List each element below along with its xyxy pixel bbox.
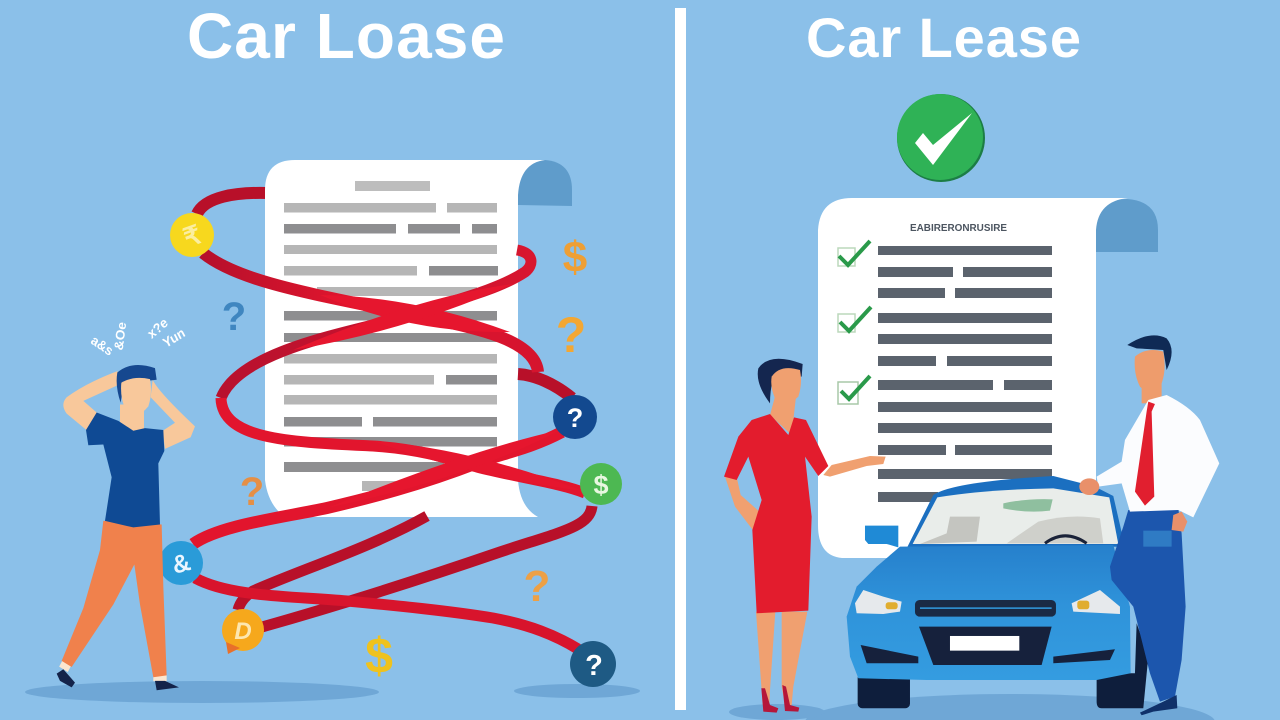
floating symbols: ? — [524, 562, 550, 611]
coin: teal question — [570, 641, 616, 687]
ground shadows — [25, 681, 640, 703]
shoes — [57, 669, 179, 690]
roof and pillars — [907, 476, 1125, 548]
person: woman in red dress — [724, 359, 886, 713]
body — [847, 545, 1131, 680]
coin: light blue ampersand — [159, 541, 203, 585]
icon: green check badge — [897, 94, 985, 182]
face — [771, 368, 801, 403]
confused scribbles: &Oe — [111, 321, 129, 351]
person: confused man — [57, 315, 195, 690]
trousers — [62, 521, 167, 677]
coin: orange — [222, 609, 264, 654]
confused scribbles — [88, 315, 188, 359]
fog lights — [861, 645, 1115, 663]
face — [1135, 350, 1165, 392]
upper grille — [915, 600, 1056, 617]
dress — [724, 414, 828, 613]
coin: yellow — [170, 213, 214, 257]
face — [121, 378, 151, 414]
coin: yellow: ₹ — [179, 219, 205, 253]
person: man in shirt and tie — [1079, 335, 1219, 715]
hands — [1079, 478, 1187, 532]
lower grille — [919, 627, 1052, 665]
document: clear contract — [818, 198, 1158, 558]
coin: dark blue question — [553, 395, 597, 439]
number plate — [950, 636, 1019, 651]
icon: checklist ticks — [838, 241, 871, 404]
legs and arms — [725, 397, 886, 705]
mirror — [865, 526, 898, 547]
panel: lease right side — [724, 94, 1219, 720]
coin: light blue ampersand: & — [169, 548, 194, 580]
center divider — [675, 8, 686, 710]
document heading: EABIRERONRUSIRE — [910, 223, 1007, 234]
socks — [59, 659, 167, 681]
coin: dark blue question: ? — [567, 403, 583, 433]
panel: loan left side — [25, 160, 640, 703]
document: confusing contract — [265, 160, 572, 517]
floating symbols: ? — [556, 307, 586, 363]
coin: teal question: ? — [585, 650, 603, 682]
car: blue front view — [847, 476, 1148, 708]
neck — [1142, 383, 1162, 403]
shirt — [1097, 395, 1219, 517]
coin: green dollar: $ — [593, 470, 609, 500]
coin: green dollar — [580, 463, 622, 505]
heels — [761, 685, 799, 713]
confused scribbles: a&s — [88, 332, 116, 359]
hair — [1127, 335, 1172, 370]
wheels — [858, 623, 1148, 708]
ribbon behind document — [197, 193, 268, 214]
title: Car Loase: Car Loase — [187, 0, 505, 72]
pocket — [1143, 531, 1172, 547]
hair — [758, 359, 803, 403]
shirt — [86, 413, 164, 527]
ribbon crossing highlights — [293, 284, 583, 508]
shoe — [1140, 695, 1177, 715]
floating symbols: $ — [563, 233, 587, 282]
floating symbols: $ — [365, 628, 393, 684]
hair — [117, 365, 157, 403]
text lines — [878, 246, 1052, 502]
headlights — [855, 590, 1120, 614]
confused scribbles: Yun — [160, 325, 188, 351]
seats and steering wheel — [920, 499, 1103, 544]
windshield — [913, 488, 1118, 544]
floating symbols: ? — [240, 470, 264, 514]
trousers — [1110, 508, 1186, 702]
ground shadows — [729, 694, 1215, 720]
floating symbols: ? — [222, 295, 246, 339]
tie — [1135, 402, 1155, 506]
coin: orange: D — [234, 618, 252, 645]
confused scribbles: x?e — [145, 315, 171, 342]
title: Car Lease: Car Lease — [806, 6, 1081, 69]
arms and neck — [63, 371, 195, 449]
floating symbols — [222, 233, 587, 684]
red tape ribbons — [193, 250, 592, 649]
